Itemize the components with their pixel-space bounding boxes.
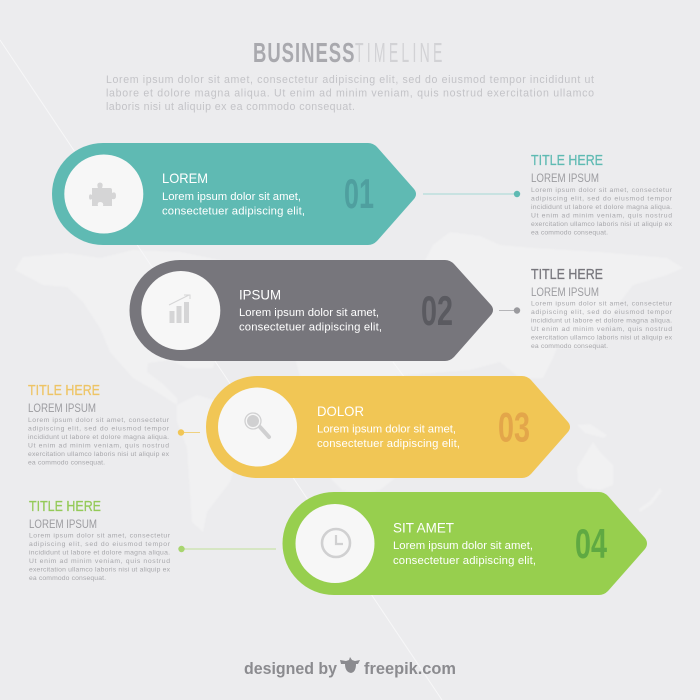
intro text: laboris nisi ut aliquip ex ea commodo consequat. [106, 101, 355, 113]
side text 4: incididunt ut labore et dolore magna aliqua. [29, 550, 170, 556]
icon: magnifier [245, 413, 269, 437]
title: TIMELINE [355, 37, 446, 68]
banner 2: ipsum: consectetuer adipiscing elit, [239, 322, 382, 334]
side text 4: ea commodo consequat. [29, 575, 106, 582]
icon: bar chart with arrow [169, 295, 190, 323]
side text 3: incididunt ut labore et dolore magna aliqua. [28, 434, 169, 441]
intro text [106, 74, 594, 113]
side text 1: exercitation ullamco laboris nisi ut aliquip ex [531, 221, 673, 228]
banner 4: sit amet: SIT AMET [393, 520, 455, 536]
side text 3: adipiscing elit, sed do eiusmod tempor [28, 426, 170, 432]
title: BUSINESS [253, 38, 355, 69]
side text 1: ea commodo consequat. [531, 230, 608, 236]
side text 3 [28, 383, 170, 466]
side text 4 [29, 499, 171, 582]
world map [15, 232, 683, 532]
side text 2: exercitation ullamco laboris nisi ut aliquip ex [531, 334, 673, 342]
banner 1: lorem [52, 143, 416, 245]
side text 1: TITLE HERE [531, 153, 603, 169]
banner 3: dolor [206, 376, 570, 478]
side text 1: incididunt ut labore et dolore magna aliqua. [531, 204, 672, 211]
title [253, 37, 446, 69]
side text 2: ea commodo consequat. [531, 343, 608, 350]
side text 4: Lorem ipsum dolor sit amet, consectetur [29, 532, 171, 540]
banner 2: ipsum [130, 260, 493, 361]
footer credit: designed by [244, 659, 338, 678]
banner 3: dolor: consectetuer adipiscing elit, [317, 438, 460, 450]
side text 2: LOREM IPSUM [531, 285, 599, 299]
decorative diagonal lines [0, 40, 442, 700]
banner 3: dolor: DOLOR [317, 404, 364, 419]
connector 4 [178, 546, 276, 552]
side text 3: Ut enim ad minim veniam, quis nostrud [28, 442, 169, 450]
icon: puzzle piece [89, 182, 116, 206]
banner 2: ipsum: Lorem ipsum dolor sit amet, [239, 307, 379, 319]
icon: freepik logo [340, 657, 360, 673]
side text 4: exercitation ullamco laboris nisi ut aliquip ex [29, 566, 171, 574]
side text 2 [531, 267, 673, 350]
banner 4: sit amet: 04 [575, 520, 607, 567]
banner 1: lorem: LOREM [162, 171, 208, 186]
banner 1: lorem: consectetuer adipiscing elit, [162, 206, 305, 218]
footer credit: freepik.com [364, 659, 456, 678]
side text 4: Ut enim ad minim veniam, quis nostrud [29, 558, 170, 565]
banner 3: dolor: Lorem ipsum dolor sit amet, [317, 424, 456, 436]
side text 1: Lorem ipsum dolor sit amet, consectetur [531, 187, 673, 194]
side text 1: Ut enim ad minim veniam, quis nostrud [531, 212, 672, 220]
side text 2: adipiscing elit, sed do eiusmod tempor [531, 309, 673, 316]
connector 2 [499, 307, 520, 314]
side text 2: Ut enim ad minim veniam, quis nostrud [531, 326, 672, 333]
banner 4: sit amet: consectetuer adipiscing elit, [393, 555, 536, 567]
banner 1: lorem: Lorem ipsum dolor sit amet, [162, 191, 301, 203]
icon: clock [322, 529, 350, 557]
banner 3: dolor: 03 [498, 404, 530, 450]
banner 1: lorem: 01 [344, 170, 374, 217]
side text 4: LOREM IPSUM [29, 517, 97, 531]
side text 2: Lorem ipsum dolor sit amet, consectetur [531, 300, 673, 308]
intro text: Lorem ipsum dolor sit amet, consectetur adipiscing elit, sed do eiusmod tempor incididunt ut [106, 74, 594, 86]
side text 2: TITLE HERE [531, 267, 603, 283]
side text 1 [531, 153, 673, 236]
banner 2: ipsum: 02 [421, 287, 453, 334]
side text 1: LOREM IPSUM [531, 171, 599, 185]
banner 2: ipsum: IPSUM [239, 288, 281, 302]
side text 2: incididunt ut labore et dolore magna aliqua. [531, 318, 672, 324]
connector 3 [178, 429, 200, 436]
side text 3: LOREM IPSUM [28, 401, 96, 415]
side text 4: TITLE HERE [29, 499, 101, 515]
intro text: labore et dolore magna aliqua. Ut enim ad minim veniam, quis nostrud exercitation ullamco [106, 88, 594, 100]
side text 3: TITLE HERE [28, 383, 100, 399]
side text 3: exercitation ullamco laboris nisi ut aliquip ex [28, 451, 170, 458]
side text 3: ea commodo consequat. [28, 460, 105, 466]
banner 4: sit amet: Lorem ipsum dolor sit amet, [393, 540, 533, 552]
side text 1: adipiscing elit, sed do eiusmod tempor [531, 196, 673, 202]
banner 4: sit amet [282, 492, 647, 595]
side text 3: Lorem ipsum dolor sit amet, consectetur [28, 417, 170, 424]
connector 1 [423, 191, 520, 197]
side text 4: adipiscing elit, sed do eiusmod tempor [29, 541, 171, 548]
footer credit [244, 657, 456, 678]
